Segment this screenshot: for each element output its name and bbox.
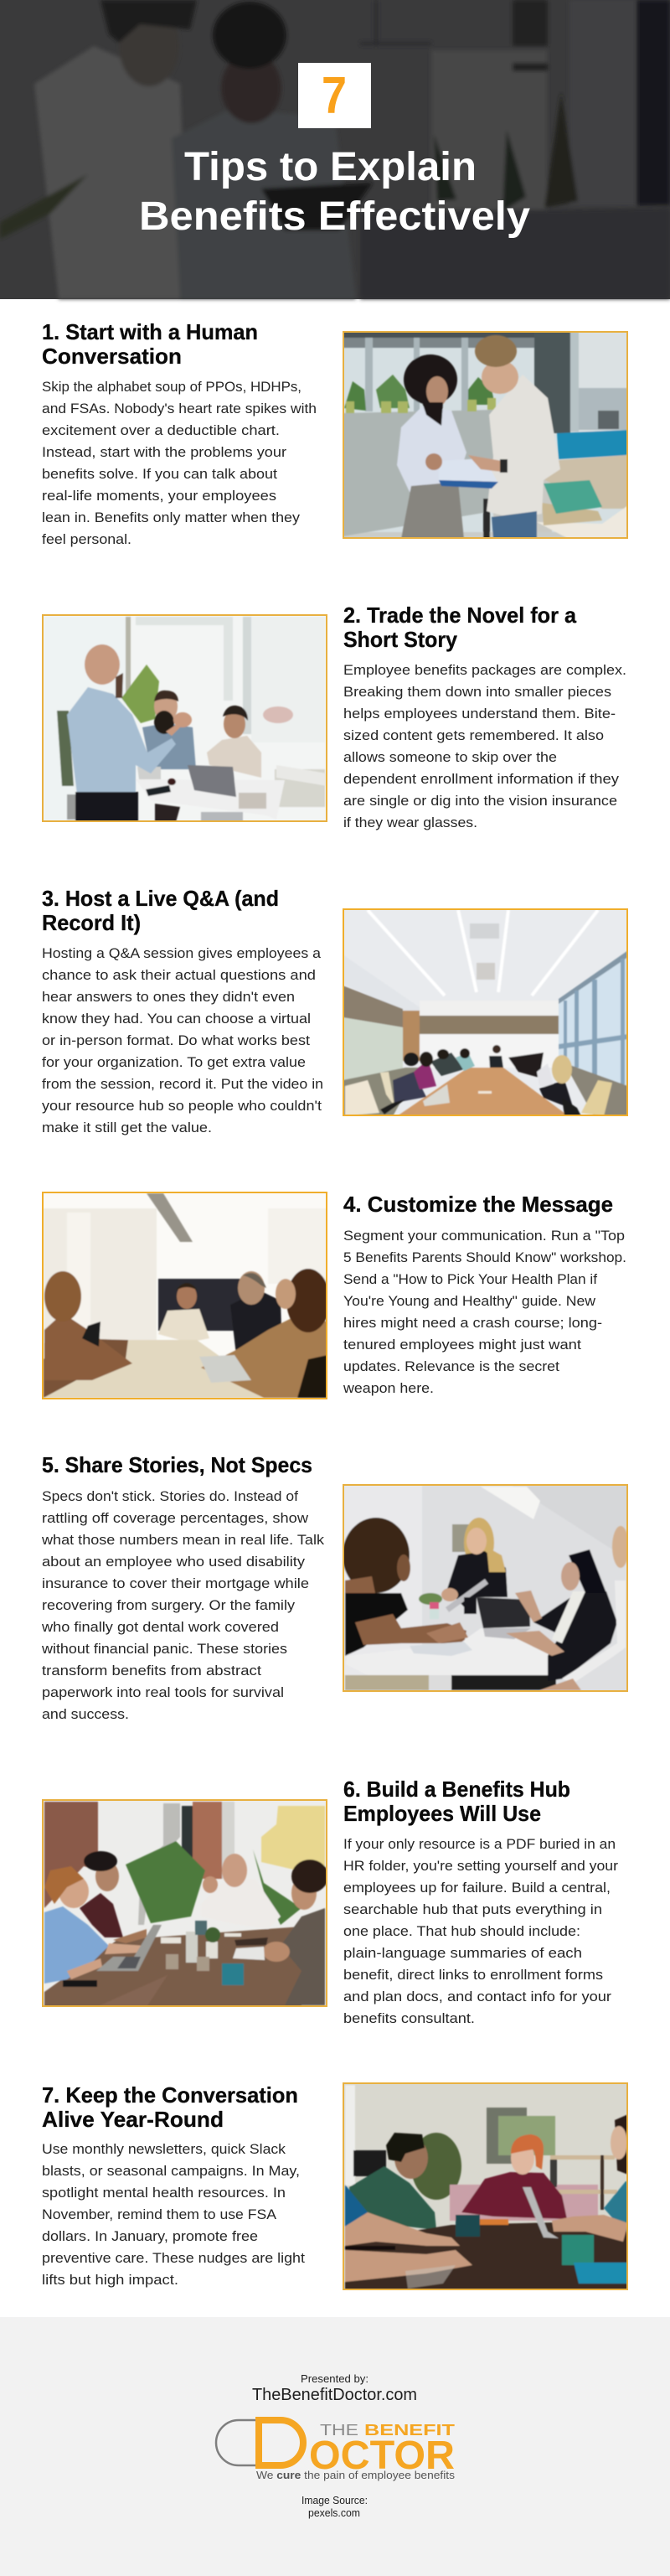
text: tip 1 body: real-life moments, your employees <box>42 488 276 504</box>
text: tip 2 body: sized content gets remembered. It also <box>343 727 604 743</box>
heading: tip 5: 5. Share Stories, Not Specs <box>42 1452 312 1477</box>
photo: man presenting to two colleagues at a table <box>42 614 327 822</box>
text: tip 4 body: Segment your communication. Run a "Top <box>343 1228 625 1244</box>
text: tip 5 body: what those numbers mean in real life. Talk <box>41 1532 325 1548</box>
text: tip 1 body: Skip the alphabet soup of PPOs, HDHPs, <box>42 379 302 395</box>
text: tip 2 body: if they wear glasses. <box>343 815 477 830</box>
text: tip 7 body: spotlight mental health resources. In <box>42 2185 286 2201</box>
wordmark: The Benefit <box>320 2422 455 2439</box>
heading: tip 1: 1. Start with a Human <box>42 319 258 344</box>
tagline: We cure the pain of employee benefits <box>256 2469 456 2481</box>
text: tip 1 body: benefits solve. If you can talk about <box>42 466 277 482</box>
heading: tip 2: 2. Trade the Novel for a <box>343 603 577 628</box>
text: tip 7 body: November, remind them to use FSA <box>42 2206 277 2222</box>
heading: tip 3 <box>42 886 279 935</box>
text: tip 3 body: or in-person format. Do what works best <box>42 1032 310 1048</box>
heading: tip 4: 4. Customize the Message <box>343 1192 613 1217</box>
text: tip 2 body: helps employees understand them. Bite- <box>343 706 616 722</box>
heading: tip 6 <box>343 1777 570 1826</box>
text: tip 1 body: lean in. Benefits only matter when they <box>42 510 301 525</box>
text: tip 7 body: lifts but high impact. <box>42 2272 178 2288</box>
text: tip 4 body: Send a "How to Pick Your Health Plan if <box>343 1271 597 1287</box>
text: tip 7 body <box>42 2141 305 2288</box>
text: tip 6 body: one place. That hub should include: <box>343 1923 580 1939</box>
text: tip 4 body: tenured employees might just want <box>343 1337 581 1353</box>
wordmark: Doctor: OCTOR <box>309 2434 455 2478</box>
text: tip 7 body: blasts, or seasonal campaigns. In May, <box>42 2163 300 2179</box>
text: tip 6 body: searchable hub that puts everything in <box>343 1901 602 1917</box>
title: Tips to Explain <box>184 145 477 189</box>
text: tip 6 body: If your only resource is a PDF buried in an <box>343 1836 616 1852</box>
text: tip 5 body: without financial panic. These stories <box>41 1641 287 1657</box>
text: tip 7 body: preventive care. These nudges are light <box>42 2250 305 2266</box>
text: tip 2 body: Breaking them down into smaller pieces <box>343 684 611 700</box>
text: tip 5 body: about an employee who used disability <box>42 1554 306 1570</box>
text: tip 2 body: dependent enrollment information if they <box>343 771 620 787</box>
text: tip 1 body: excitement over a deductible chart. <box>42 422 280 438</box>
photo: team around a wooden table with plants <box>42 1799 328 2007</box>
text: tip 5 body: rattling off coverage percentages, show <box>42 1510 309 1526</box>
text: tip 2 body <box>343 662 626 830</box>
text: tip 5 body: insurance to cover their mortgage while <box>42 1575 309 1591</box>
text: tip 3 body: hear answers to ones they didn't even <box>42 989 295 1005</box>
text: tip 4 body: 5 Benefits Parents Should Know" workshop. <box>343 1249 626 1265</box>
text: tip 6 body: employees up for failure. Build a central, <box>343 1880 611 1896</box>
panel: tip 4 <box>42 1192 626 1399</box>
text: tip 6 body <box>343 1836 618 2026</box>
text: presented by: TheBenefitDoctor.com <box>252 2386 417 2404</box>
heading: tip 7: 7. Keep the Conversation <box>42 2082 298 2108</box>
panel: tip 7 <box>42 2082 628 2290</box>
icon: letter D <box>259 2420 303 2465</box>
text: tip 3 body: chance to ask their actual questions and <box>42 967 316 983</box>
photo: colleagues around a white desk <box>343 1484 629 1692</box>
text: tip 4 body: You're Young and Healthy" guide. New <box>343 1293 596 1309</box>
wordmark: The Benefit: THE <box>320 2422 358 2439</box>
wordmark: The Benefit: BENEFIT <box>364 2422 455 2439</box>
text: tip 5 body: Specs don't stick. Stories do. Instead of <box>42 1488 298 1504</box>
panel: tip 5 <box>41 1452 629 1722</box>
photo: four people at a meeting table <box>42 1192 330 1399</box>
text: tip 1 body: and FSAs. Nobody's heart rate spikes with <box>42 401 317 416</box>
text: tip 6 body: and plan docs, and contact info for your <box>343 1989 611 2004</box>
text: tip 6 body: plain-language summaries of each <box>343 1945 582 1961</box>
heading: tip 3: 3. Host a Live Q&A (and <box>42 886 279 911</box>
text: tip 3 body: Hosting a Q&A session gives employees a <box>42 945 322 961</box>
text: tip 7 body: dollars. In January, promote free <box>42 2228 258 2244</box>
title <box>139 145 530 239</box>
heading: tip 7: Alive Year-Round <box>42 2107 224 2132</box>
heading: tip 6: Employees Will Use <box>343 1801 541 1826</box>
photo: colleagues smiling at a dark table <box>343 2082 628 2290</box>
text: tip 4 body <box>343 1228 626 1396</box>
text: tip 6 body: HR folder, you're setting yourself and your <box>343 1858 618 1874</box>
title: Benefits Effectively <box>139 194 530 239</box>
text: tip 5 body: recovering from surgery. Or the family <box>42 1597 296 1613</box>
photo: two colleagues reading a document <box>343 331 628 539</box>
text: tip 2 body: allows someone to skip over the <box>343 749 557 765</box>
number badge: 7 <box>322 67 347 125</box>
heading: tip 7 <box>42 2082 298 2132</box>
text: tip 4 body: hires might need a crash course; long- <box>343 1315 602 1331</box>
text: tip 6 body: benefit, direct links to enrollment forms <box>343 1967 603 1983</box>
text: presented by <box>252 2372 417 2404</box>
panel: footer <box>0 2317 670 2576</box>
heading: tip 2 <box>343 603 577 652</box>
text: tip 1 body <box>42 379 317 547</box>
text: tip 3 body: from the session, record it. Put the video in <box>42 1076 323 1092</box>
panel: tip 6 <box>42 1777 618 2026</box>
number badge <box>298 63 371 128</box>
text: tip 7 body: Use monthly newsletters, quick Slack <box>42 2141 286 2157</box>
text: image source: pexels.com <box>308 2506 360 2519</box>
hero background photo <box>0 0 670 299</box>
panel: tip 3 <box>42 886 628 1135</box>
text: tip 2 body: are single or dig into the vision insurance <box>343 793 617 809</box>
text: tip 1 body: feel personal. <box>42 531 131 547</box>
heading: tip 1: Conversation <box>42 344 182 369</box>
text: tip 5 body: paperwork into real tools for survival <box>42 1684 284 1700</box>
text: tip 4 body: weapon here. <box>343 1380 434 1396</box>
text: image source: Image Source: <box>302 2494 368 2506</box>
photo: long conference room meeting <box>343 908 628 1116</box>
text: image source <box>302 2494 368 2519</box>
text: tip 3 body <box>42 945 323 1135</box>
heading: tip 2: Short Story <box>343 627 458 652</box>
text: tip 2 body: Employee benefits packages are complex. <box>343 662 626 678</box>
text: tip 3 body: know they had. You can choose a virtual <box>42 1011 311 1027</box>
heading: tip 6: 6. Build a Benefits Hub <box>343 1777 570 1802</box>
text: tip 4 body: updates. Relevance is the secret <box>343 1358 559 1374</box>
panel: tip 1 <box>42 319 628 547</box>
icon: capsule outline <box>216 2420 255 2465</box>
text: tip 1 body: Instead, start with the problems your <box>42 444 286 460</box>
panel: hero header <box>0 0 670 299</box>
text: tip 3 body: your resource hub so people who couldn't <box>42 1098 322 1114</box>
text: tip 5 body: transform benefits from abstract <box>42 1663 261 1679</box>
text: tip 5 body: and success. <box>42 1706 129 1722</box>
text: tip 5 body: who finally got dental work covered <box>41 1619 279 1635</box>
panel: tip 2 <box>42 603 626 830</box>
heading: tip 3: Record It) <box>42 910 141 935</box>
text: tip 6 body: benefits consultant. <box>343 2010 475 2026</box>
text: tip 3 body: for your organization. To get extra value <box>42 1054 306 1070</box>
text: tip 3 body: make it still get the value. <box>42 1120 212 1135</box>
logo: The Benefit Doctor <box>216 2420 456 2481</box>
heading: tip 1 <box>42 319 258 369</box>
text: presented by: Presented by: <box>301 2372 368 2385</box>
text: tip 5 body <box>41 1488 325 1722</box>
